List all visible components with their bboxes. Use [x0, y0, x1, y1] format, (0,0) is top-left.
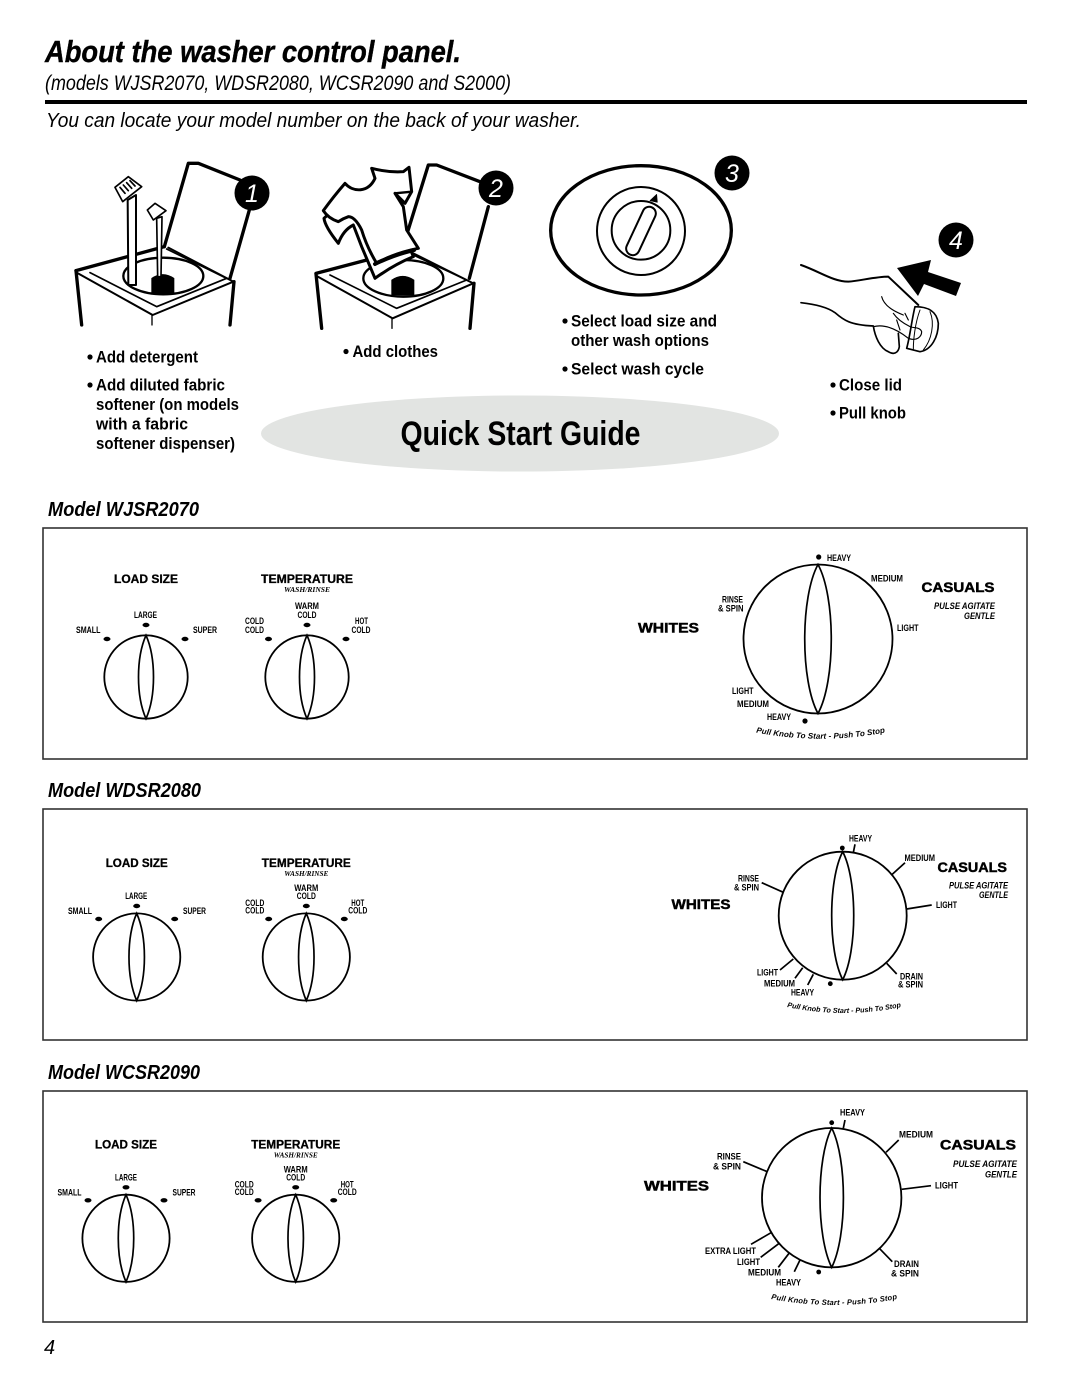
temperature knob: WASH/RINSE: [274, 1150, 318, 1159]
cycle dial: MEDIUM: [871, 574, 903, 584]
temperature knob: HOT: [341, 1179, 354, 1190]
panel: WJSR2070: [42, 527, 1028, 760]
load size knob: SUPER: [183, 906, 206, 917]
temperature knob: COLD: [348, 906, 367, 916]
temperature knob: COLD: [245, 906, 264, 916]
illustration: step 3 select cycle dial: [551, 156, 750, 295]
cycle dial: MEDIUM: [748, 1268, 781, 1278]
temperature knob: [235, 1139, 357, 1282]
step 3 instructions: Select wash cycle: [571, 360, 704, 378]
temperature knob: WASH/RINSE: [284, 585, 330, 594]
step 4 instructions: Pull knob: [839, 404, 906, 422]
cycle dial: LIGHT: [935, 1180, 958, 1192]
temperature knob: [245, 574, 371, 719]
temperature knob: COLD: [352, 625, 371, 636]
illustration: step 1 add detergent: [76, 163, 269, 325]
cycle dial: [638, 553, 996, 739]
temperature knob: WASH/RINSE: [284, 869, 328, 878]
illustration: step 3 select cycle dial: 3: [725, 160, 739, 188]
step 3 instructions: other wash options: [571, 332, 709, 350]
temperature knob: HOT: [355, 616, 368, 627]
load size knob: LOAD SIZE: [114, 574, 178, 586]
cycle dial: DRAIN: [900, 972, 923, 982]
cycle dial: HEAVY: [840, 1108, 866, 1118]
temperature knob: COLD: [235, 1179, 254, 1190]
step 1 instructions: Add diluted fabric: [96, 376, 225, 394]
temperature knob: COLD: [245, 898, 264, 909]
temperature knob: TEMPERATURE: [262, 858, 351, 870]
heading: model WDSR2080: Model WDSR2080: [48, 779, 202, 802]
cycle dial: HEAVY: [827, 553, 851, 564]
temperature knob: COLD: [235, 1187, 254, 1198]
temperature knob: COLD: [297, 891, 316, 902]
step 1 instructions: with a fabric: [95, 416, 188, 434]
load size knob: LARGE: [134, 610, 157, 621]
cycle dial: LIGHT: [737, 1257, 760, 1268]
cycle dial: & SPIN: [734, 882, 759, 894]
step 4 instructions: Close lid: [839, 376, 902, 394]
cycle dial: HEAVY: [767, 712, 791, 723]
load size knob: LOAD SIZE: [106, 858, 168, 870]
temperature knob: WARM: [284, 1164, 308, 1175]
step 4 instructions: [830, 376, 906, 422]
temperature knob: COLD: [245, 616, 264, 627]
cycle dial: HEAVY: [791, 988, 814, 998]
cycle dial: & SPIN: [891, 1268, 919, 1280]
temperature knob: TEMPERATURE: [261, 574, 353, 586]
step 1 instructions: softener (on models: [96, 396, 239, 414]
temperature knob: COLD: [286, 1172, 305, 1183]
cycle dial: PULSE AGITATE: [934, 601, 996, 612]
cycle dial: GENTLE: [979, 890, 1008, 901]
cycle dial: MEDIUM: [899, 1130, 933, 1140]
cycle dial: WHITES: [638, 620, 699, 636]
illustration: step 4 pull knob: [801, 222, 974, 353]
step 1 instructions: Add detergent: [96, 348, 198, 366]
step 3 instructions: [562, 312, 717, 378]
load size knob: SUPER: [172, 1187, 196, 1198]
page number: 4: [44, 1337, 55, 1359]
quick start guide banner: [261, 396, 779, 472]
step 1 instructions: [87, 348, 239, 453]
cycle dial: LIGHT: [757, 968, 778, 978]
temperature knob: COLD: [338, 1187, 357, 1198]
temperature knob: TEMPERATURE: [251, 1139, 341, 1151]
panel: WDSR2080: [42, 808, 1028, 1041]
cycle dial: MEDIUM: [904, 853, 935, 864]
step 1 instructions: softener dispenser): [96, 435, 235, 453]
step 2 instructions: Add clothes: [352, 343, 438, 361]
cycle dial: & SPIN: [898, 980, 923, 990]
cycle dial: WHITES: [672, 897, 730, 912]
cycle dial: GENTLE: [985, 1170, 1018, 1180]
heading: model WJSR2070: Model WJSR2070: [48, 498, 200, 521]
load size knob: SUPER: [193, 625, 217, 636]
illustration: step 2 add clothes: [316, 165, 514, 328]
cycle dial: GENTLE: [964, 611, 996, 622]
temperature knob: [245, 858, 367, 1001]
header rule: [45, 100, 1027, 104]
cycle dial: LIGHT: [936, 900, 957, 911]
load size knob: LARGE: [115, 1172, 137, 1183]
cycle dial: & SPIN: [718, 604, 744, 614]
cycle dial: LIGHT: [732, 686, 754, 697]
cycle dial: & SPIN: [713, 1162, 741, 1172]
title: About the washer control panel.: [44, 34, 461, 69]
quick start guide banner: Quick Start Guide: [400, 415, 640, 453]
model number note: You can locate your model number on the back of your washer.: [46, 110, 581, 132]
illustration: step 1 add detergent: 1: [245, 180, 259, 208]
cycle dial: WHITES: [644, 1178, 709, 1194]
load size knob: SMALL: [76, 625, 101, 636]
cycle dial: DRAIN: [894, 1259, 919, 1270]
cycle dial: [671, 834, 1009, 1014]
cycle dial: PULSE AGITATE: [949, 880, 1009, 892]
illustration: step 4 pull knob: 4: [949, 227, 963, 255]
load size knob: LOAD SIZE: [95, 1139, 157, 1151]
temperature knob: COLD: [245, 625, 264, 636]
cycle dial: CASUALS: [940, 1138, 1016, 1152]
step 3 instructions: Select load size and: [571, 312, 717, 330]
temperature knob: WARM: [294, 883, 318, 894]
icon: arrow: [897, 260, 961, 296]
cycle dial: Pull Knob To Start - Push To Stop: [756, 727, 884, 739]
cycle dial: MEDIUM: [764, 978, 795, 990]
load size knob: LARGE: [125, 891, 147, 902]
subtitle: models: (models WJSR2070, WDSR2080, WCSR2090 and S2000): [45, 72, 511, 95]
temperature knob: COLD: [298, 610, 317, 621]
cycle dial: MEDIUM: [737, 699, 769, 710]
illustration: step 2 add clothes: 2: [488, 175, 503, 203]
temperature knob: WARM: [295, 601, 319, 612]
panel: WCSR2090: [42, 1090, 1028, 1323]
cycle dial: RINSE: [722, 594, 743, 606]
cycle dial: [644, 1108, 1018, 1306]
cycle dial: HEAVY: [849, 834, 872, 844]
cycle dial: RINSE: [738, 874, 759, 884]
temperature knob: HOT: [351, 898, 364, 909]
cycle dial: CASUALS: [938, 860, 1007, 875]
heading: model WCSR2090: Model WCSR2090: [48, 1061, 201, 1084]
load size knob: [58, 1139, 196, 1282]
load size knob: SMALL: [68, 906, 92, 917]
cycle dial: RINSE: [717, 1152, 741, 1162]
load size knob: SMALL: [58, 1187, 82, 1198]
cycle dial: Pull Knob To Start - Push To Stop: [771, 1294, 897, 1306]
cycle dial: Pull Knob To Start - Push To Stop: [787, 1002, 900, 1014]
cycle dial: CASUALS: [922, 580, 994, 595]
cycle dial: EXTRA LIGHT: [705, 1246, 756, 1257]
cycle dial: HEAVY: [776, 1278, 802, 1288]
load size knob: [76, 574, 217, 719]
load size knob: [68, 858, 206, 1001]
cycle dial: PULSE AGITATE: [953, 1159, 1018, 1170]
cycle dial: LIGHT: [897, 623, 919, 634]
